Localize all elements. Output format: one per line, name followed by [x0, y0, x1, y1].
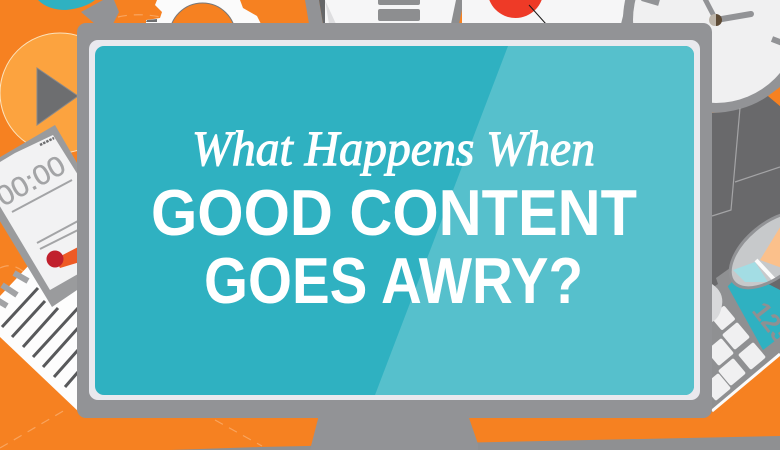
- panel: monitor: [77, 23, 712, 418]
- monitor casing: [77, 23, 712, 418]
- icon: teal blob: [38, 0, 95, 10]
- icon: play button: [0, 33, 120, 153]
- monitor base band: [170, 436, 780, 450]
- screen glare: [375, 46, 694, 395]
- title: [151, 120, 637, 317]
- icon: stopwatch phone: [0, 125, 80, 307]
- icon: hourglass: [712, 214, 780, 322]
- orange desk under calculator: [712, 358, 780, 437]
- monitor bezel: [89, 40, 700, 400]
- icon: stopwatch knob: [81, 0, 119, 24]
- icon: spiral notepad: [0, 264, 80, 413]
- icon: red dial: [462, 0, 636, 24]
- screen: [95, 46, 694, 395]
- title: good content: GOOD CONTENT: [151, 176, 637, 249]
- title: script line: What Happens When: [192, 120, 595, 176]
- monitor stand: [310, 415, 478, 450]
- panel: dark desk tile: [712, 96, 780, 290]
- title: goes awry: GOES AWRY?: [204, 244, 583, 317]
- icon: gear: [146, 0, 261, 69]
- icon: calculator: [703, 272, 780, 412]
- icon: orange wedge: [768, 87, 780, 106]
- icon: browser window with menu bars: [262, 0, 464, 24]
- icon: wall clock: [623, 0, 780, 113]
